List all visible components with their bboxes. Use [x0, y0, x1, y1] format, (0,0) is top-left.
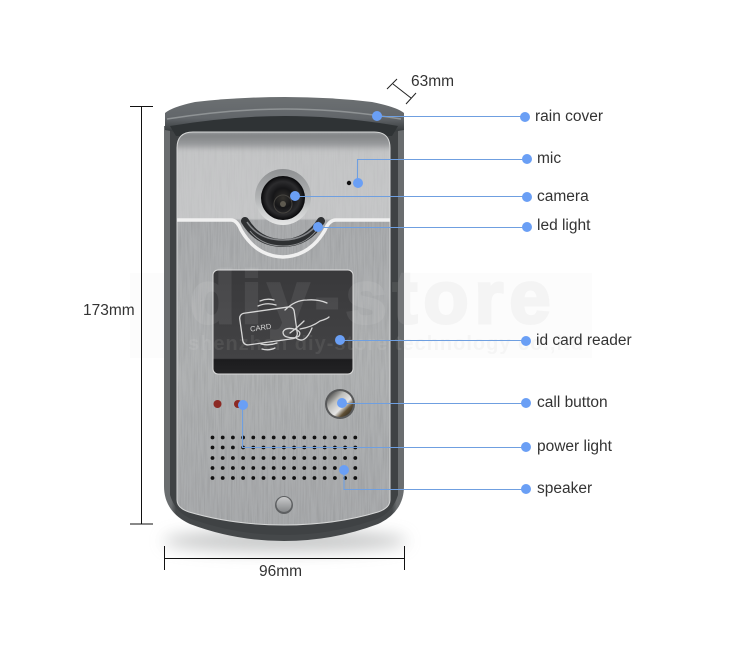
- callout: mic: mic: [537, 150, 561, 167]
- watermark over device: diy-store: [190, 256, 557, 339]
- callout: camera: camera: [537, 188, 589, 205]
- watermark backdrop: diy-store: [190, 256, 557, 339]
- bottom screw: [275, 496, 293, 514]
- callout: power light: power light: [537, 438, 613, 455]
- device shadow: [163, 530, 407, 552]
- callout: id card reader: [335, 332, 632, 349]
- call button: [325, 389, 355, 419]
- door station device: [164, 97, 404, 541]
- text: CARD: CARD: [250, 322, 272, 334]
- callout: led light: [313, 217, 591, 234]
- callout: camera: [290, 188, 589, 205]
- watermark backdrop: shenzhen diy-store technology co.,ltd: [188, 333, 584, 355]
- dimension: depth 63mm: [387, 73, 454, 104]
- dimension: height 173mm: 173mm: [83, 302, 135, 319]
- housing: [164, 126, 404, 541]
- callout: power light: [238, 400, 613, 455]
- card reader screen: [213, 270, 353, 374]
- callout: call button: [337, 394, 608, 411]
- speaker holes: [212, 438, 357, 478]
- watermark backdrop: [130, 256, 592, 358]
- callout: rain cover: rain cover: [535, 108, 603, 125]
- callout: speaker: speaker: [537, 480, 592, 497]
- dimension: height 173mm: [83, 106, 153, 524]
- led indicators: [214, 400, 242, 408]
- callout: call button: call button: [537, 394, 608, 411]
- mic hole: [347, 181, 351, 185]
- rain cover: [165, 97, 404, 132]
- callout: mic: [353, 150, 561, 188]
- callout: speaker: [339, 465, 592, 497]
- callout: rain cover: [372, 108, 603, 125]
- callout: led light: led light: [537, 217, 591, 234]
- dimension: width 96mm: [164, 546, 404, 580]
- dimension: depth 63mm: 63mm: [411, 73, 454, 90]
- led light arc: [245, 221, 321, 246]
- camera: [255, 169, 311, 225]
- faceplate band: [177, 220, 390, 257]
- callout: id card reader: id card reader: [536, 332, 632, 349]
- dimension: width 96mm: 96mm: [259, 563, 302, 580]
- icon: card and hand: [239, 299, 329, 350]
- watermark over device: shenzhen diy-store technology co.,ltd: [188, 333, 584, 355]
- faceplate: [174, 132, 393, 525]
